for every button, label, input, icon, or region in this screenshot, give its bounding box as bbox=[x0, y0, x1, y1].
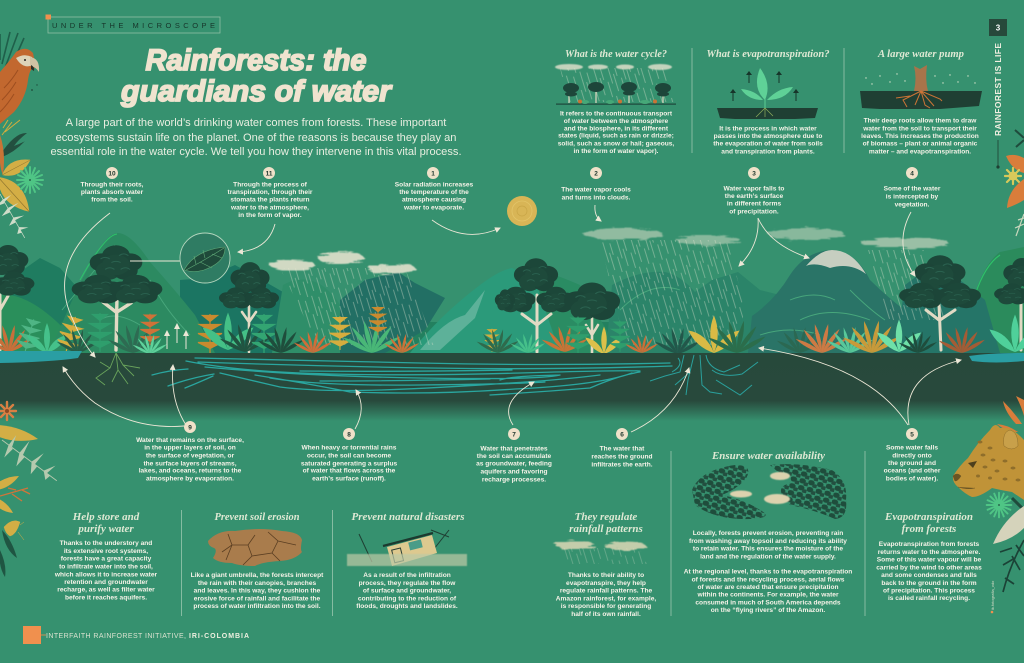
step 4 bbox=[884, 167, 941, 276]
roots: teal bbox=[650, 355, 758, 395]
panel: evapotranspiration from forests: Evapotranspiration from forests bbox=[879, 541, 980, 548]
step 5 bbox=[884, 428, 941, 482]
panel: evapotranspiration from forests: and some condenses and falls bbox=[881, 572, 977, 579]
panel: help store and purify water: to infiltrate water into the soil, bbox=[59, 563, 153, 570]
step 8: earth’s surface (runoff). bbox=[312, 475, 386, 482]
page number: 3 bbox=[996, 24, 1001, 32]
step 6 bbox=[591, 428, 653, 468]
step 4: Some of the water bbox=[884, 185, 941, 192]
step 8 bbox=[301, 428, 398, 482]
step 2 bbox=[561, 167, 631, 221]
panel: help store and purify water: which allows it to increase water bbox=[54, 571, 158, 578]
step 7: recharge processes. bbox=[482, 476, 546, 483]
step 10: plants absorb water bbox=[81, 189, 144, 196]
panel: evapotranspiration from forests: from forests bbox=[902, 523, 956, 535]
step 9: atmosphere by evaporation. bbox=[146, 475, 234, 482]
step 4: vegetation. bbox=[895, 201, 930, 208]
step 1 bbox=[395, 167, 500, 234]
panel: ensure water availability: from washing away topsoil and reducing its ability bbox=[689, 538, 847, 545]
step 11: transpiration, through their bbox=[228, 189, 313, 196]
panel: evapotranspiration from forests: Evapotranspiration bbox=[884, 511, 973, 523]
footer: IRI-COLOMBIA bbox=[189, 633, 249, 640]
flooded house bbox=[347, 530, 467, 566]
step 11: water to the atmosphere, bbox=[230, 204, 309, 211]
panel: prevent natural disasters: floods, droughts and landslides. bbox=[356, 603, 458, 610]
panel: help store and purify water: forests have a great capacity bbox=[61, 555, 152, 562]
forest from above bbox=[692, 464, 846, 519]
panel: help store and purify water bbox=[54, 511, 158, 601]
step 9: Water that remains on the surface, bbox=[136, 437, 244, 444]
panel: evapotranspiration from forests: carried by the wind to other areas bbox=[876, 564, 982, 571]
panel: ensure water availability: Ensure water availability bbox=[711, 450, 825, 462]
panel: prevent soil erosion: process of water infiltration into the soil. bbox=[193, 603, 321, 610]
footer: INTERFAITH RAINFOREST INITIATIVE, bbox=[46, 633, 186, 640]
panel: prevent soil erosion: and leaves. In this way, they cushion the bbox=[194, 587, 321, 594]
panel: they regulate rainfall patterns: rainfall patterns bbox=[569, 523, 643, 535]
step 9: the surface layers of streams, bbox=[143, 460, 237, 467]
step 10: Through their roots, bbox=[80, 181, 144, 188]
panel: evapotranspiration from forests: returns water to the atmosphere. bbox=[878, 549, 980, 556]
panel: prevent natural disasters: process, they regulate the flow bbox=[359, 580, 456, 587]
panel: evapotranspiration from forests: Some of this water vapour will be bbox=[877, 556, 982, 564]
divider bbox=[692, 48, 844, 153]
panel: what is the water cycle bbox=[555, 48, 676, 155]
mountains bbox=[0, 233, 1024, 354]
panel: prevent soil erosion: erosive force of rainfall and facilitate the bbox=[194, 595, 321, 602]
panel: prevent natural disasters bbox=[347, 511, 467, 610]
panel: what is evapotranspiration bbox=[706, 48, 830, 155]
panel: help store and purify water: Help store and bbox=[72, 511, 140, 523]
plant illustration bbox=[717, 68, 818, 119]
step 5: Some water falls bbox=[886, 444, 938, 451]
panel: what is evapotranspiration: What is evapotranspiration? bbox=[706, 48, 830, 60]
step 11: in the form of vapor. bbox=[238, 212, 302, 219]
panel: they regulate rainfall patterns: evapotranspire, they help bbox=[566, 580, 646, 587]
step 8: 8 bbox=[347, 431, 351, 438]
panel: what is evapotranspiration: the evaporation of water from soils bbox=[713, 140, 823, 147]
step 2: 2 bbox=[594, 170, 598, 177]
rain bbox=[280, 240, 945, 345]
leaf magnifier bbox=[130, 233, 230, 283]
step 4: is intercepted by bbox=[886, 193, 939, 200]
water lines bbox=[152, 358, 672, 395]
panel: they regulate rainfall patterns: Thanks to their ability to bbox=[568, 572, 644, 579]
step 3: 3 bbox=[752, 170, 756, 177]
step 3: the earth’s surface bbox=[725, 193, 784, 200]
panel: what is evapotranspiration: It is the process in which water bbox=[719, 125, 817, 132]
step 11 bbox=[228, 167, 313, 252]
step 3 bbox=[724, 167, 809, 266]
panel: a large water pump: A large water pump bbox=[877, 48, 964, 60]
step 2: and turns into clouds. bbox=[562, 194, 631, 201]
water cycle illustration bbox=[555, 64, 676, 105]
step 5: 5 bbox=[910, 431, 914, 438]
panel: help store and purify water: retention and groundwater bbox=[64, 579, 148, 586]
panel: a large water pump: Their deep roots allow them to draw bbox=[864, 117, 977, 124]
step 5: oceans (and other bbox=[884, 467, 941, 474]
landscape panel: mountains, clouds, rain, plants bbox=[0, 228, 1024, 356]
decoration: jaguar and leaves, bottom right bbox=[953, 396, 1024, 592]
panel: prevent soil erosion: Like a giant umbrella, the forests intercept bbox=[191, 572, 324, 579]
arrows to step labels bbox=[63, 348, 961, 432]
step 7: 7 bbox=[512, 431, 516, 438]
step 6: reaches the ground bbox=[591, 453, 653, 460]
footer bbox=[23, 626, 249, 644]
panel: help store and purify water: Thanks to the understory and bbox=[60, 540, 152, 547]
panel: evapotranspiration from forests bbox=[876, 511, 982, 602]
step 9: lakes, and oceans, returns to the bbox=[139, 467, 242, 474]
step 9: 9 bbox=[188, 424, 192, 431]
panel: ensure water availability: within the continents. For example, the water bbox=[696, 591, 839, 598]
panel: they regulate rainfall patterns: half of its own rainfall. bbox=[571, 611, 641, 618]
small arrows: transpiration bbox=[167, 324, 186, 349]
panel: help store and purify water: recharge, as well as filter water bbox=[57, 586, 155, 593]
panel: prevent natural disasters: of surface and groundwater, bbox=[363, 587, 451, 594]
panel: ensure water availability: consumed in much of South America depends bbox=[695, 599, 841, 606]
panel: a large water pump bbox=[860, 48, 982, 155]
intro text: essential role in the water cycle. We tell you how they intervene in this vital process. bbox=[50, 146, 462, 158]
panel: what is evapotranspiration: and transpiration from plants. bbox=[721, 148, 815, 155]
panel: ensure water availability bbox=[684, 450, 852, 614]
page number bbox=[989, 19, 1007, 36]
decoration: parrot and leaves, top left bbox=[0, 32, 43, 238]
panel: evapotranspiration from forests: back to the ground in the form bbox=[881, 580, 977, 587]
panel: what is evapotranspiration: passes into the atmosphere due to bbox=[714, 133, 822, 140]
decoration: leaves, bottom left bbox=[0, 402, 60, 577]
panel: they regulate rainfall patterns: They regulate bbox=[575, 511, 637, 523]
icon: sun bbox=[507, 196, 537, 226]
panel: what is the water cycle: in the form of water vapor). bbox=[574, 148, 659, 155]
panel: a large water pump: of biomass – plant or animal organic bbox=[863, 140, 978, 147]
title bbox=[120, 44, 393, 108]
roots: green bbox=[96, 353, 140, 385]
title: Rainforests: the bbox=[146, 44, 366, 77]
step 7: aquifers and favoring bbox=[480, 468, 548, 475]
trees bbox=[0, 245, 1024, 353]
panel: what is the water cycle: It refers to the continuous transport bbox=[560, 110, 673, 117]
panel: what is the water cycle: What is the water cycle? bbox=[565, 48, 667, 60]
plants bbox=[0, 306, 1024, 356]
panel: they regulate rainfall patterns: Amazon rainforest, for example, bbox=[556, 595, 656, 602]
rain cloud bbox=[555, 541, 648, 564]
tree stump illustration bbox=[860, 65, 982, 109]
intro text: ecosystems sustain life on the planet. One of the reasons is because they play an bbox=[56, 132, 456, 144]
step 6: infiltrates the earth. bbox=[591, 461, 653, 468]
soil and groundwater panel bbox=[0, 351, 1024, 421]
step 3: Water vapor falls to bbox=[724, 185, 784, 192]
title: guardians of water bbox=[120, 75, 393, 108]
step 11: stomata the plants return bbox=[230, 196, 310, 204]
step 8: occur, the soil can become bbox=[307, 452, 391, 459]
panel: they regulate rainfall patterns: is responsible for generating bbox=[561, 603, 651, 610]
step 3: of precipitation. bbox=[729, 208, 779, 215]
step 7: as groundwater, feeding bbox=[476, 460, 552, 467]
step 1: water to evaporate. bbox=[403, 204, 464, 211]
cracked earth bbox=[208, 529, 302, 566]
step 5: directly onto bbox=[892, 452, 932, 459]
panel: they regulate rainfall patterns bbox=[555, 511, 656, 618]
panel: prevent natural disasters: Prevent natural disasters bbox=[352, 511, 464, 523]
panel: a large water pump: leaves. This increases the production bbox=[861, 133, 979, 140]
clouds bbox=[269, 228, 949, 274]
step 1: atmosphere causing bbox=[402, 196, 466, 204]
panel: prevent soil erosion bbox=[191, 511, 324, 610]
step 5: bodies of water). bbox=[886, 475, 938, 482]
section label: rainforest is life: RAINFOREST IS LIFE bbox=[993, 43, 1003, 136]
step 9: in the upper layers of soil, on bbox=[144, 444, 236, 451]
decoration: leaves, top right bbox=[1005, 130, 1024, 236]
panel: prevent natural disasters: contributing to the reduction of bbox=[358, 595, 457, 602]
tag: under the microscope bbox=[46, 14, 220, 33]
panel: ensure water availability: on the “flying rivers” of the Amazon. bbox=[711, 607, 825, 614]
step 11: Through the process of bbox=[233, 181, 308, 188]
credit: ik.fotografia_vdo bbox=[990, 580, 995, 610]
step 1: Solar radiation increases bbox=[395, 181, 474, 188]
step 9: the surface of vegetation, or bbox=[146, 452, 235, 459]
step 10: 10 bbox=[108, 170, 116, 177]
step 1: the temperature of the bbox=[399, 189, 469, 196]
dividers bottom bbox=[182, 451, 865, 616]
panel: a large water pump: matter – and evapotranspiration. bbox=[869, 148, 971, 155]
panel: help store and purify water: purify water bbox=[77, 523, 134, 535]
step 6: 6 bbox=[620, 431, 624, 438]
step 7: Water that penetrates bbox=[480, 445, 548, 452]
panel: they regulate rainfall patterns: regulate rainfall patterns. The bbox=[560, 587, 652, 594]
step 8: of water that flows across the bbox=[303, 467, 396, 474]
ponds bbox=[0, 351, 82, 363]
panel: ensure water availability: to retain water. This ensures the moisture of the bbox=[693, 545, 843, 552]
step 4: 4 bbox=[910, 170, 914, 177]
step 7 bbox=[476, 428, 552, 483]
panel: ensure water availability: land and the regulation of the water supply. bbox=[700, 553, 836, 560]
panel: ensure water availability: of water are created that ensure precipitation bbox=[697, 584, 839, 591]
step 5: the ground and bbox=[888, 460, 936, 467]
jaguar head bbox=[953, 425, 1024, 500]
panel: prevent soil erosion: the rain with their canopies, branches bbox=[198, 580, 317, 587]
panel: what is the water cycle: solid, such as snow or hail; gaseous, bbox=[558, 140, 674, 147]
panel: evapotranspiration from forests: of precipitation. This process bbox=[883, 587, 975, 594]
step 6: The water that bbox=[600, 445, 645, 452]
panel: prevent soil erosion: Prevent soil erosion bbox=[214, 511, 300, 523]
step 9 bbox=[136, 421, 244, 482]
panel: ensure water availability: At the regional level, thanks to the evapotranspiration bbox=[684, 568, 852, 575]
step 8: When heavy or torrential rains bbox=[302, 444, 397, 451]
step 10: from the soil. bbox=[91, 196, 133, 204]
panel: help store and purify water: before it reaches aquifers. bbox=[65, 594, 147, 601]
step 3: in different forms bbox=[727, 200, 781, 207]
step 8: saturated generating a surplus bbox=[301, 460, 398, 467]
panel: what is the water cycle: states (liquid, such as rain or drizzle; bbox=[558, 132, 674, 140]
panel: help store and purify water: its extensive root systems, bbox=[64, 548, 148, 555]
panel: evapotranspiration from forests: is called rainfall recycling. bbox=[888, 595, 970, 602]
panel: prevent natural disasters: As a result of the infiltration bbox=[363, 572, 451, 579]
intro text: A large part of the world’s drinking water comes from forests. These important bbox=[66, 117, 446, 129]
panel: a large water pump: water from the soil to transport their bbox=[862, 125, 977, 132]
panel: ensure water availability: Locally, forests prevent erosion, preventing rain bbox=[693, 530, 843, 537]
tag: under the microscope: UNDER THE MICROSCOPE bbox=[52, 21, 215, 30]
panel: ensure water availability: of forests and the recycling process, aerial flows bbox=[692, 576, 845, 583]
panel: what is the water cycle: of water between the atmosphere bbox=[564, 118, 669, 125]
panel: what is the water cycle: and the biosphere, in its different bbox=[564, 125, 669, 132]
step 7: the soil can accumulate bbox=[477, 453, 552, 460]
step 10 bbox=[65, 167, 144, 357]
step 11: 11 bbox=[266, 170, 273, 177]
step 1: 1 bbox=[431, 170, 435, 177]
step 2: The water vapor cools bbox=[561, 186, 631, 193]
